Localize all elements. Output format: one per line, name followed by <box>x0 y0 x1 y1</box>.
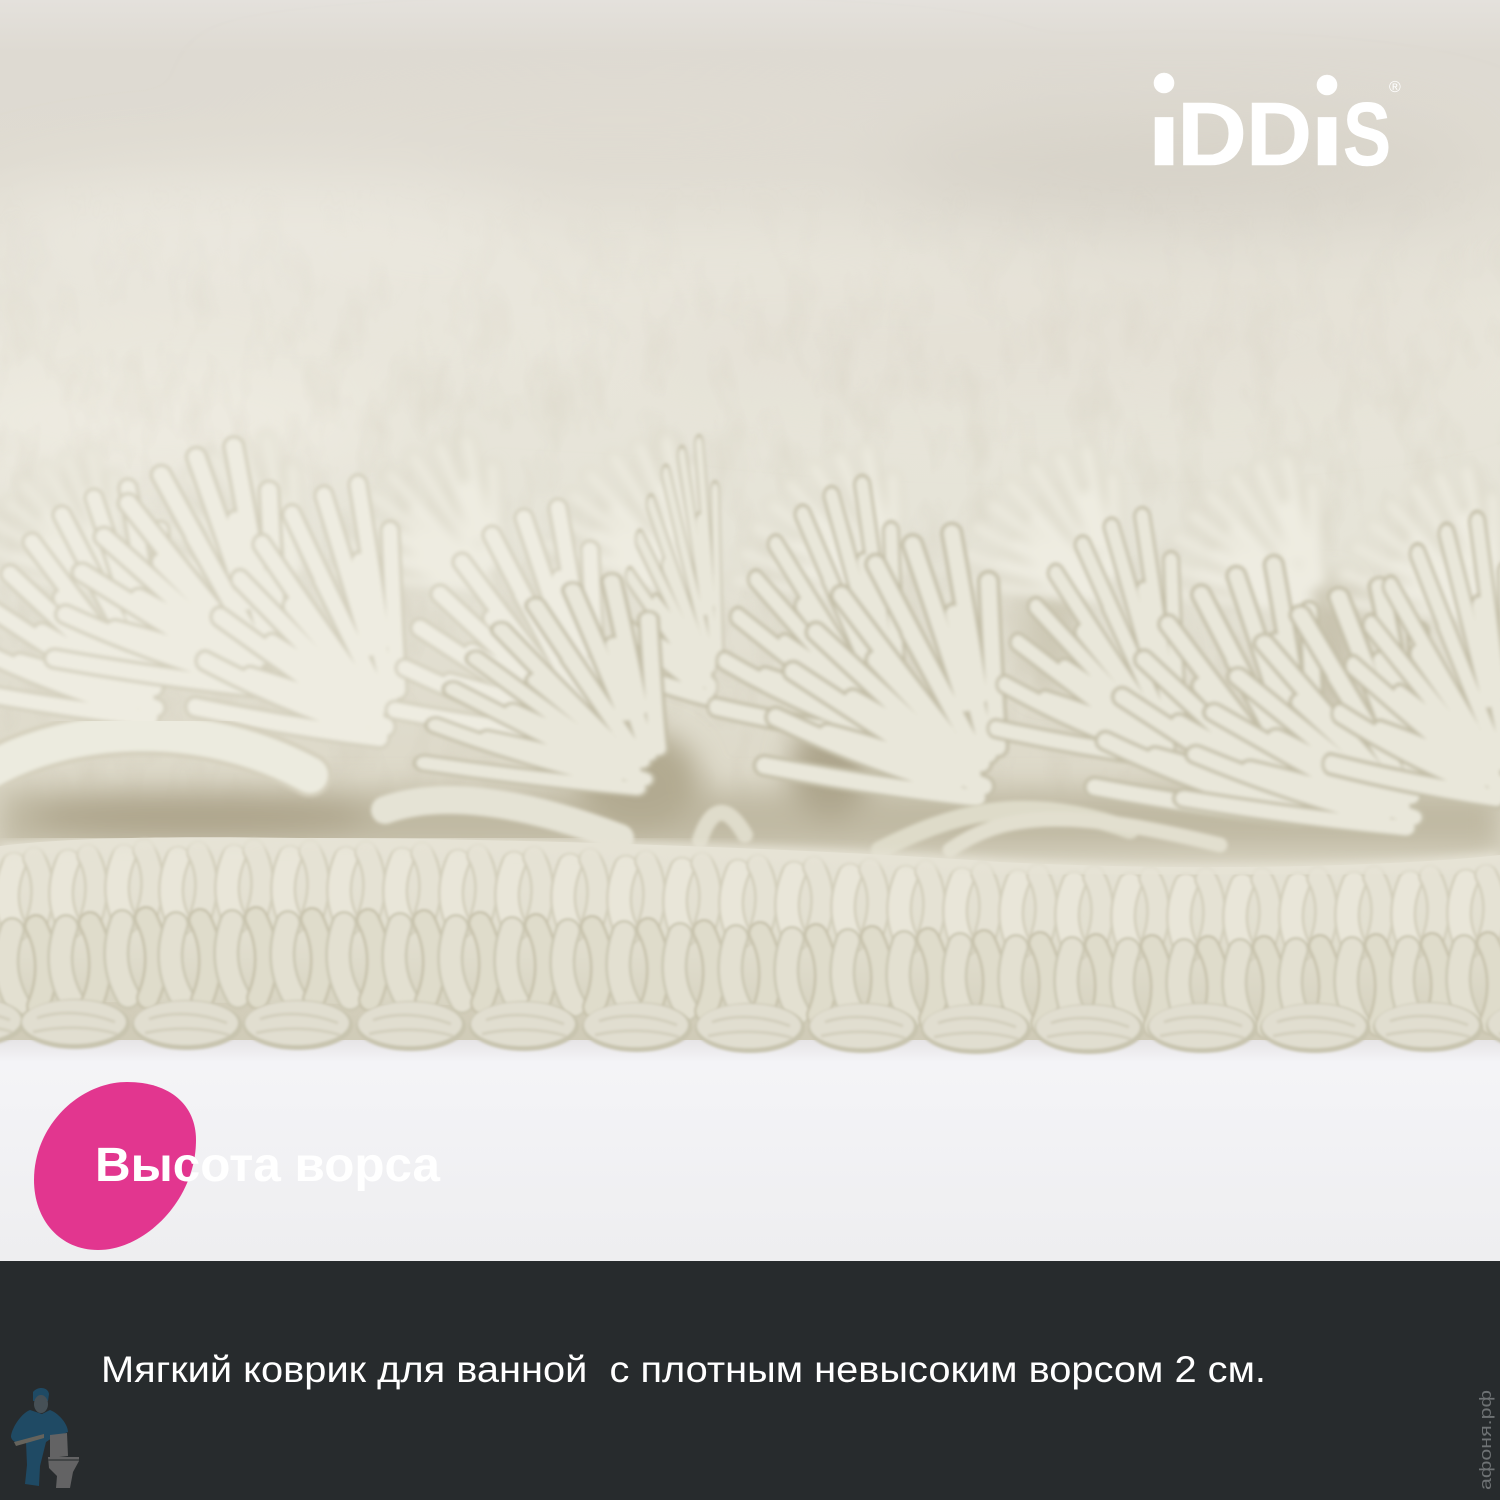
woven border band <box>0 837 1500 1054</box>
watermark: site name: афоня.рф <box>1476 1390 1495 1490</box>
photo backdrop <box>0 0 1500 1070</box>
logo: IDDIS: S <box>1343 85 1391 185</box>
border band body <box>0 837 1500 1030</box>
floor: white surface <box>0 1040 1500 1261</box>
mid pile tufts <box>0 438 1498 619</box>
logo: IDDIS: D <box>1246 85 1312 185</box>
border beads <box>0 997 1500 1054</box>
logo: IDDIS: ı <box>1146 85 1182 185</box>
pile texture <box>195 401 984 618</box>
logo: IDDIS: D <box>1177 85 1247 185</box>
bottom dark panel <box>0 1261 1500 1500</box>
description text: Мягкий коврик для ванной с плотным невысоким ворсом 2 см. <box>101 1349 1266 1390</box>
pink accent blob <box>34 1082 196 1250</box>
heading: Высота ворса <box>95 1139 440 1192</box>
logo: IDDIS <box>1146 73 1401 185</box>
logo: IDDIS: ı <box>1309 85 1345 185</box>
front tufts <box>0 445 1500 828</box>
band top fringe softening <box>0 841 1500 871</box>
logo: IDDIS: ® <box>1389 79 1401 96</box>
soft far pile <box>0 90 1480 480</box>
icon: plumber with toilet watermark <box>11 1388 79 1488</box>
deep shadows under the pile <box>0 550 1500 850</box>
border twists <box>6 850 1498 1027</box>
loose front strands <box>0 733 1220 850</box>
